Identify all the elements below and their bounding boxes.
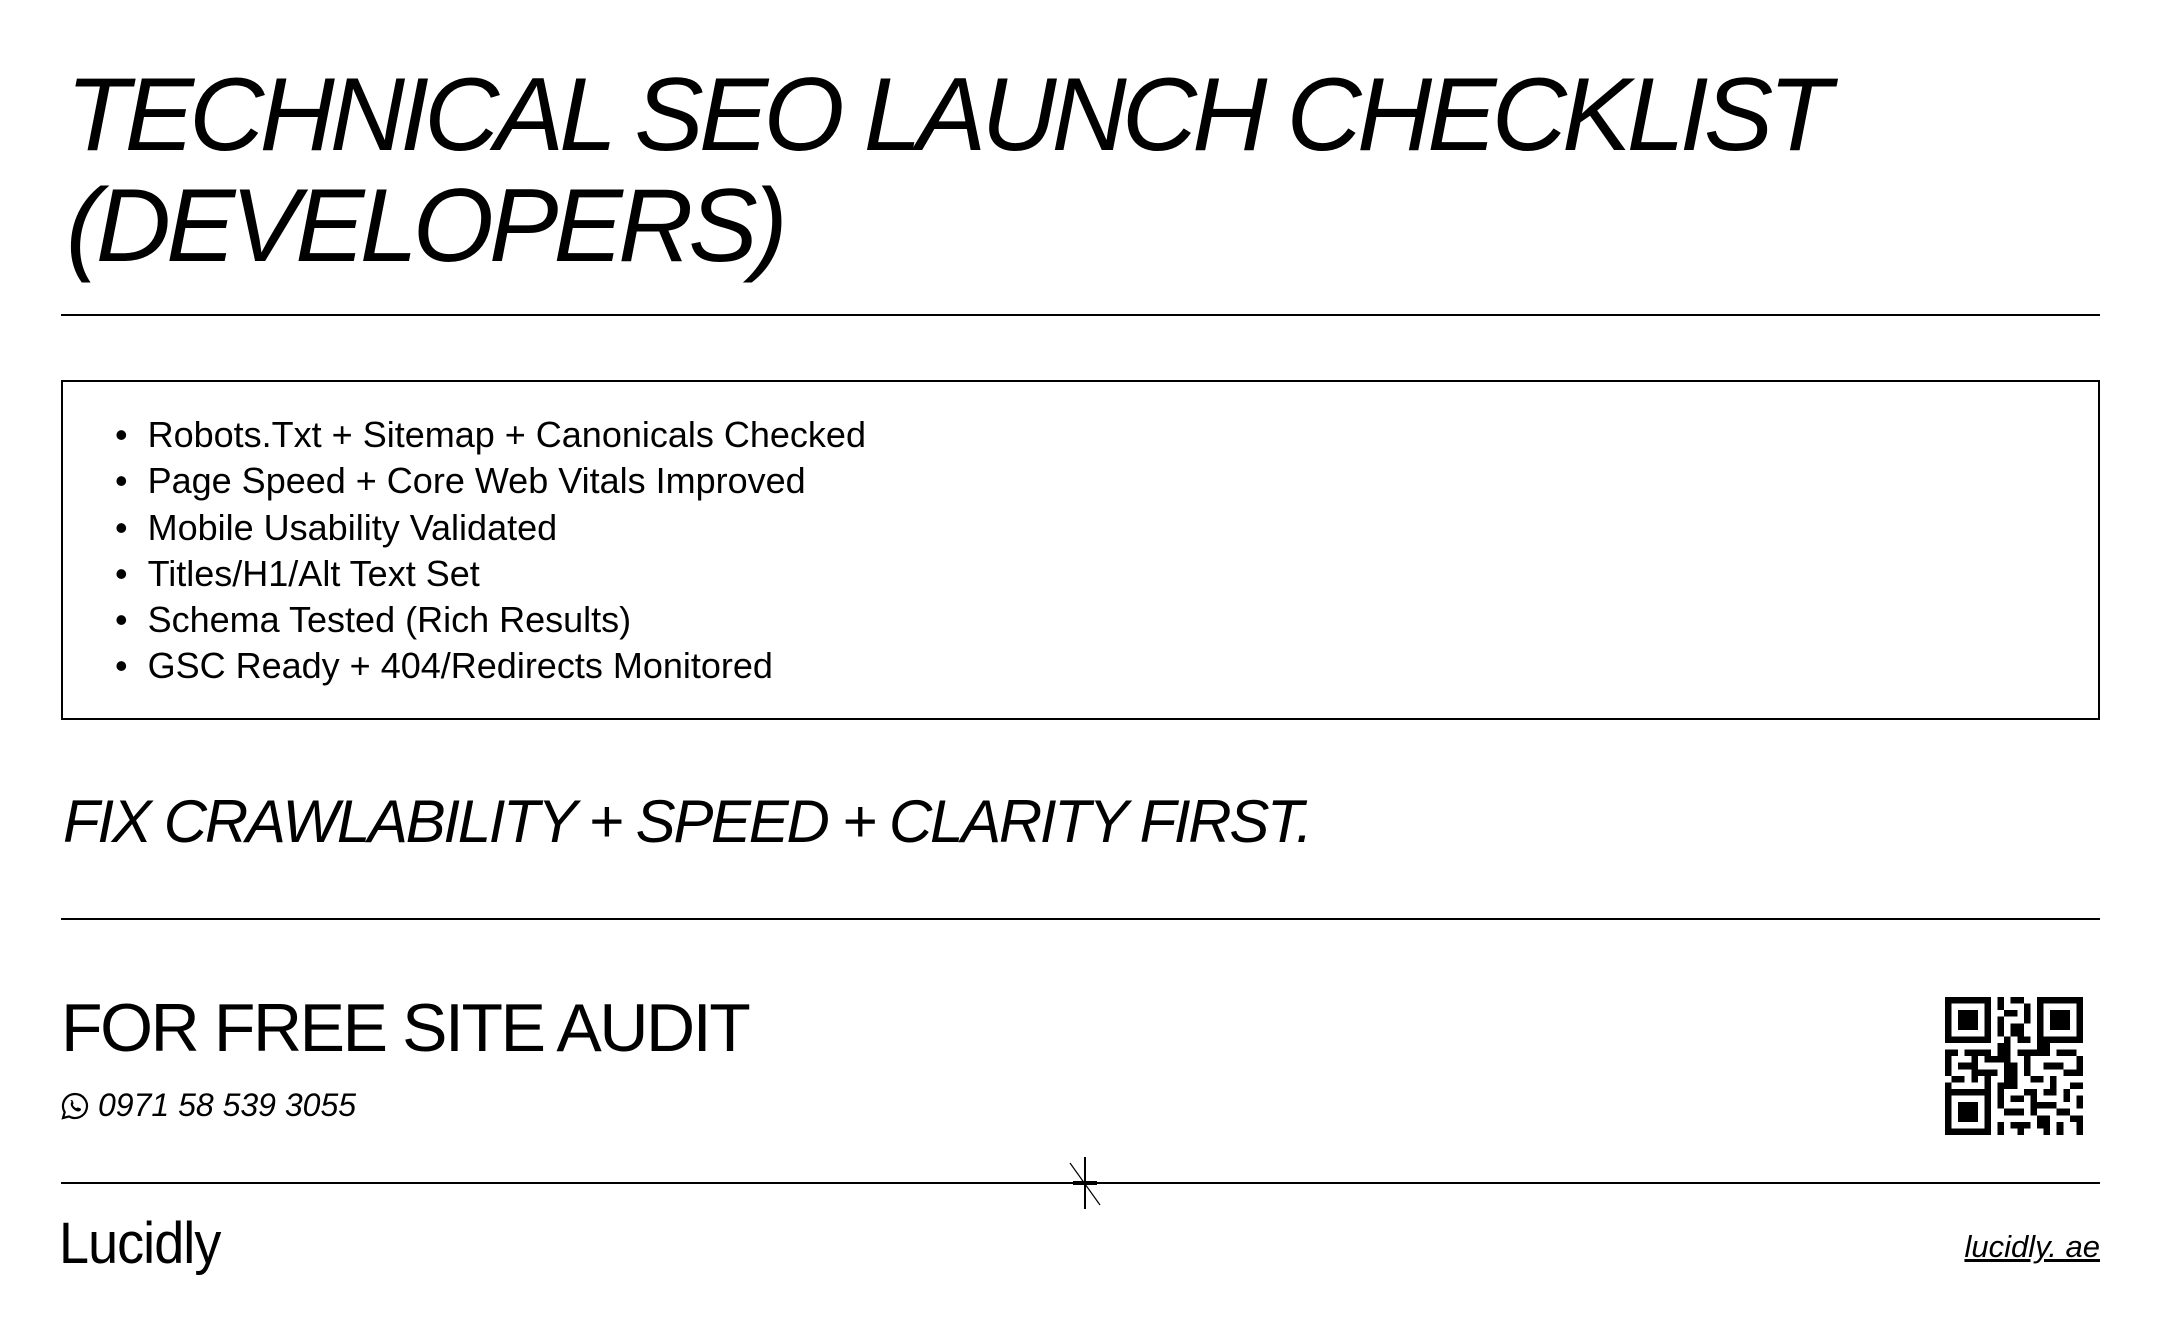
title: TECHNICAL SEO LAUNCH CHECKLIST [66, 57, 1827, 173]
checklist items: • Robots.Txt + Sitemap + Canonicals Checked [115, 414, 866, 455]
title: (DEVELOPERS) [66, 168, 783, 284]
phone contact: 0971 58 539 3055 [98, 1087, 356, 1123]
logo: Lucidly: Lucidly [59, 1211, 220, 1276]
checklist items [115, 414, 866, 686]
tagline: FIX CRAWLABILITY + SPEED + CLARITY FIRST. [63, 788, 1310, 855]
CTA heading: FOR FREE SITE AUDIT [61, 990, 748, 1066]
icon: crosshair marker [1070, 1157, 1100, 1209]
icon: whatsapp [61, 1092, 88, 1120]
website link: lucidly. ae [1964, 1229, 2100, 1264]
checklist items: • Page Speed + Core Web Vitals Improved [115, 460, 806, 501]
panel: checklist [61, 380, 2100, 720]
checklist items: • Mobile Usability Validated [115, 507, 557, 548]
QR code [1945, 997, 2083, 1135]
title [66, 57, 1838, 284]
checklist items: • Schema Tested (Rich Results) [115, 599, 631, 640]
checklist items: • Titles/H1/Alt Text Set [115, 553, 480, 594]
checklist items: • GSC Ready + 404/Redirects Monitored [115, 645, 773, 686]
